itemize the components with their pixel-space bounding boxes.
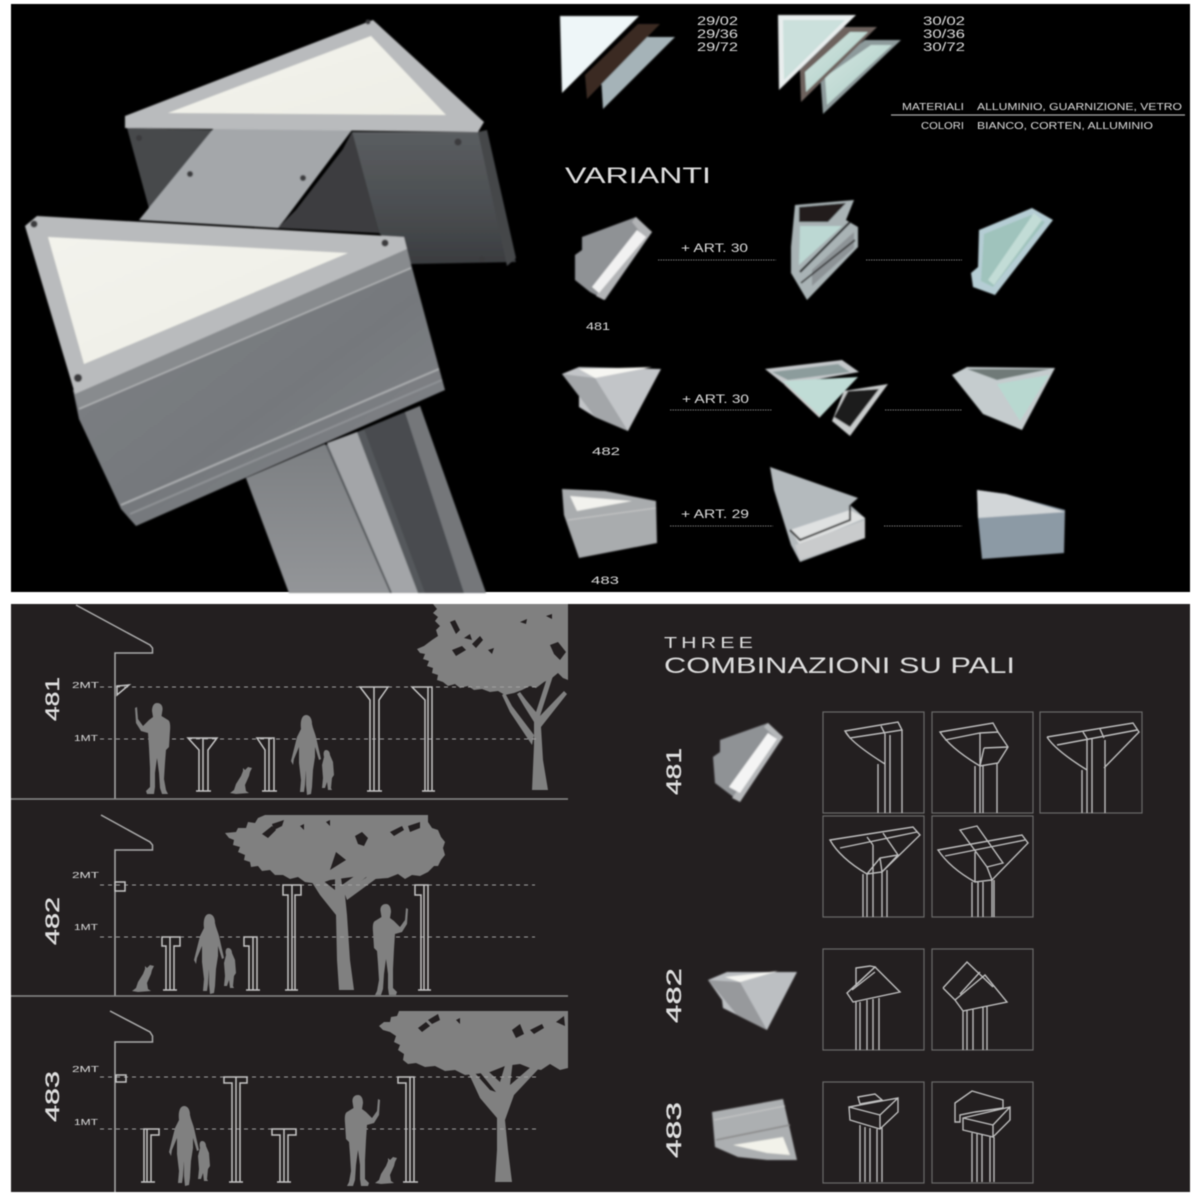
panel: bottom installation and combinations: [11, 604, 1190, 1192]
accessory swatches: art. 29 triangles: [560, 16, 675, 109]
lamp 483: [562, 489, 657, 558]
assembled lamp 483: [977, 490, 1065, 559]
accessory codes 29: 29/72: [697, 42, 738, 54]
people and dog: [132, 904, 408, 995]
tree: [379, 1011, 568, 1182]
heading: varianti: VARIANTI: [565, 163, 711, 188]
height labels: [72, 1064, 99, 1127]
height labels: [72, 680, 99, 743]
code 482 rotated: 482: [43, 897, 64, 945]
combinations: model 481: [663, 712, 1142, 917]
combination box 2: [932, 949, 1033, 1050]
assembled lamp 482: [952, 367, 1055, 430]
accessory codes 29: 29/36: [697, 29, 738, 41]
specifications: materials and colours: BIANCO, CORTEN, ALLUMINIO: [977, 120, 1153, 132]
art. 30 label: + ART. 30: [681, 241, 748, 255]
specifications: materials and colours: ALLUMINIO, GUARNIZIONE, VETRO: [977, 101, 1182, 113]
tree: [225, 815, 445, 990]
accessory codes 30: [923, 16, 965, 54]
specifications: materials and colours: [891, 101, 1185, 132]
dotted connector: [884, 525, 962, 527]
lamp 482: [708, 971, 797, 1030]
combination box 1: [823, 1082, 924, 1183]
code 481: 481: [586, 321, 610, 333]
lamp 482: [562, 367, 661, 431]
code 482: 482: [592, 446, 620, 458]
section: 481 installation heights: [11, 604, 568, 799]
specifications: materials and colours: COLORI: [921, 120, 964, 132]
tree: [417, 604, 568, 790]
ground line: [11, 798, 568, 800]
height labels: [72, 870, 99, 932]
dotted connector: [885, 409, 962, 411]
accessory codes 29: 29/02: [697, 16, 738, 28]
ground line: [11, 995, 568, 997]
code 483: 483: [591, 575, 619, 587]
combination box 2: [932, 1082, 1033, 1183]
combination box 5: [932, 816, 1033, 917]
dotted connector: [658, 259, 776, 261]
variant row: 481 + art. 30: [575, 200, 1053, 333]
height guides: [100, 687, 537, 739]
dotted connector: [670, 409, 772, 411]
exploded view 483: [770, 467, 865, 562]
exploded view 482: [765, 360, 888, 436]
section: 483 installation heights: [43, 1011, 568, 1192]
poles 482: [115, 882, 431, 990]
lamp 481: [575, 217, 652, 300]
exploded view 481: [791, 200, 858, 300]
code 483 rotated: 483: [43, 1071, 64, 1122]
combinations: model 482: [663, 949, 1033, 1050]
code 482 rotated: 482: [663, 968, 686, 1023]
art. 30 label: + ART. 30: [682, 392, 749, 406]
heading: three combinazioni su pali: COMBINAZIONI SU PALI: [664, 653, 1015, 678]
heading: three combinazioni su pali: THREE: [664, 635, 757, 652]
specifications: materials and colours: MATERIALI: [902, 101, 964, 113]
house outline: [101, 815, 152, 996]
height guides: [100, 885, 535, 937]
product photo: twin triangular bollard lamp: [25, 20, 516, 593]
lamp 483: [712, 1099, 797, 1160]
combination box 4: [823, 816, 924, 917]
house outline: [110, 1011, 152, 1192]
code 481 rotated: 481: [663, 748, 686, 795]
accessory swatches: art. 30 triangles: [778, 15, 901, 114]
combination box 2: [932, 712, 1033, 813]
heading: three combinazioni su pali: [664, 635, 1015, 678]
poles 481: [117, 685, 435, 791]
accessory codes 29: [697, 16, 738, 54]
accessory codes 30: 30/36: [923, 29, 965, 41]
assembled lamp 481: [971, 208, 1053, 295]
height labels: 1MT: [74, 733, 98, 743]
height labels: 2MT: [72, 870, 99, 880]
dotted connector: [670, 525, 773, 527]
code 483 rotated: 483: [663, 1102, 686, 1158]
variant row: 483 + art. 29: [562, 467, 1065, 587]
combination box 1: [823, 949, 924, 1050]
art. 29 label: + ART. 29: [681, 507, 749, 521]
height labels: 1MT: [74, 1117, 98, 1127]
combinations: model 483: [663, 1082, 1033, 1183]
panel: top product overview: [11, 4, 1190, 593]
height labels: 2MT: [72, 1064, 99, 1074]
combination box 1: [823, 712, 924, 813]
people and dog: [169, 1095, 397, 1186]
accessory codes 30: 30/02: [923, 16, 965, 28]
height guides: [100, 1077, 537, 1129]
lamp 481: [713, 723, 783, 802]
section: 482 installation heights: [11, 815, 568, 996]
code 481 rotated: 481: [43, 677, 64, 721]
accessory codes 30: 30/72: [923, 42, 965, 54]
poles 483: [116, 1075, 418, 1182]
height labels: 2MT: [72, 680, 99, 690]
people and dog: [135, 703, 334, 795]
variant row: 482 + art. 30: [562, 360, 1055, 458]
dotted connector: [866, 259, 962, 261]
height labels: 1MT: [74, 922, 98, 932]
house outline: [76, 605, 152, 799]
combination box 3: [1040, 712, 1142, 813]
